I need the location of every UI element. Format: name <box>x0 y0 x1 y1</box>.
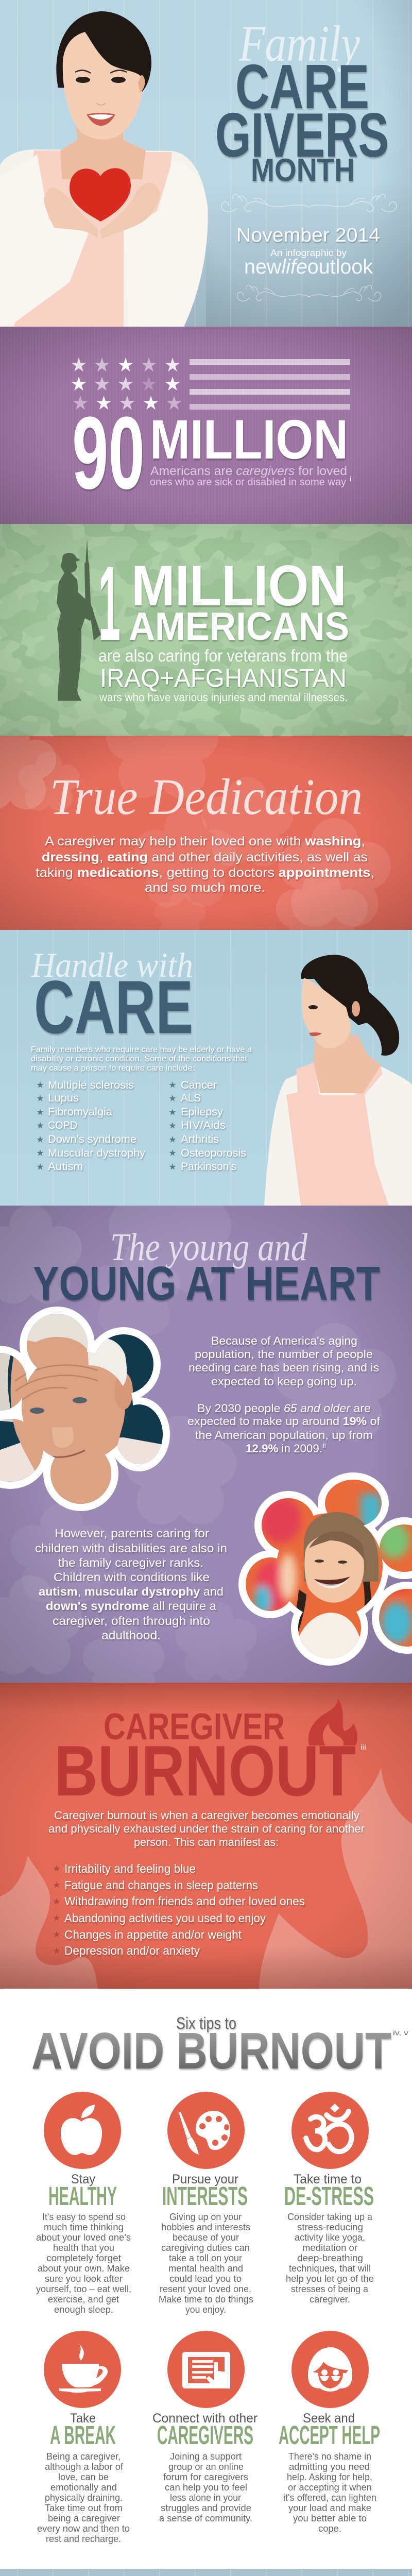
tip: take a break: love, can be <box>58 2472 109 2482</box>
ornament <box>237 285 381 301</box>
tip: seek and accept help: or accepting it when <box>288 2482 372 2493</box>
list: conditions left column: Autism <box>48 1161 83 1173</box>
ornament <box>221 194 397 212</box>
icon: flag stars <box>72 358 181 410</box>
tip: take a break <box>37 2331 130 2544</box>
statistic: 1 million americans: 1 <box>98 545 121 663</box>
tip: take a break: rest and recharge. <box>46 2534 121 2544</box>
text: burnout definition: and physically exhausted under the strain of caring for another <box>48 1822 365 1835</box>
tip: stay healthy: HEALTHY <box>48 2181 117 2211</box>
list: conditions left column: COPD <box>48 1120 77 1131</box>
tip: stay healthy <box>36 2092 131 2315</box>
tip: stay healthy: about your own. Make <box>38 2263 130 2274</box>
photo: smiling child in flower frame <box>237 1468 412 1669</box>
panel: true dedication <box>0 689 412 959</box>
text: children with disabilities: caregiver, often through into <box>53 1614 210 1628</box>
tip: take a break: A BREAK <box>50 2420 116 2450</box>
tip: stay healthy: enough sleep. <box>54 2304 113 2315</box>
icon: flag stripes <box>190 359 350 410</box>
tip: take time to de-stress: activity like yoga, <box>295 2232 365 2243</box>
list: conditions right column <box>169 1079 246 1173</box>
tip: take time to de-stress: caregiver. <box>310 2294 350 2304</box>
statistic: 90 million: 90 <box>72 396 145 511</box>
panel: 1 million americans <box>0 524 412 736</box>
text: conditions intro <box>31 1045 252 1073</box>
statistic: 1 million americans: MILLION <box>131 554 347 618</box>
tip: connect with other caregivers: struggles and provide <box>161 2503 251 2513</box>
list: conditions right column: ALS <box>181 1092 201 1104</box>
tip: take time to de-stress: stresses of being a <box>291 2284 369 2294</box>
text: conditions intro: may cause a person to require care include: <box>31 1064 195 1073</box>
text: 2030 statistic: ii <box>323 1442 326 1449</box>
tip: seek and accept help: There's no shame in <box>288 2451 371 2462</box>
tip: connect with other caregivers: can help you to feel <box>165 2482 247 2493</box>
tip: seek and accept help: cope. <box>318 2523 341 2534</box>
heading: Six tips to: Six tips to <box>176 2014 236 2032</box>
text: 2030 statistic <box>187 1402 381 1455</box>
photo: elderly man in flower frame <box>0 1303 175 1515</box>
icon: flame <box>308 1698 357 1745</box>
list: conditions right column: Arthritis <box>181 1133 219 1145</box>
text: veterans description: wars who have various injuries and mental illnesses. <box>99 691 348 704</box>
tip: stay healthy: about your loved one's <box>36 2232 131 2243</box>
panel: young and young at heart <box>0 1174 412 1701</box>
icon: tablet and hand <box>167 2331 245 2408</box>
list: burnout symptoms: Fatigue and changes in sleep patterns <box>64 1878 258 1892</box>
tip: connect with other caregivers: group or an online <box>168 2462 244 2472</box>
date and byline <box>238 228 381 274</box>
tip: take time to de-stress <box>284 2092 374 2304</box>
icon: palette and brush <box>167 2092 245 2169</box>
tip: take time to de-stress: Take time to <box>294 2172 362 2187</box>
tip: stay healthy: much time thinking <box>44 2222 124 2232</box>
list: conditions left column: Down's syndrome <box>48 1133 136 1145</box>
text: children with disabilities: autism, muscular dystrophy and <box>39 1585 224 1598</box>
tip: stay healthy: yourself, too – eat well, <box>36 2284 131 2294</box>
tip: stay healthy: exercise, and get <box>48 2294 119 2304</box>
heading: Caregiver Burnout <box>54 1706 356 1811</box>
tip: pursue your interests: Make time to do things <box>159 2294 253 2304</box>
tip: take a break: Take <box>70 2411 96 2426</box>
tip: seek and accept help: help. Asking for help, <box>287 2472 372 2482</box>
tip: take a break: Take time out from <box>45 2503 123 2513</box>
text: dedication description: A caregiver may help their loved one with washing , <box>45 834 365 849</box>
tip: stay healthy: completely forget <box>46 2253 121 2263</box>
heading: Caregiver Burnout: CAREGIVER <box>104 1706 285 1748</box>
tip: take time to de-stress: meditation or <box>302 2243 357 2253</box>
list: conditions right column: HIV/Aids <box>181 1120 226 1131</box>
tip: connect with other caregivers: less alone in your <box>170 2493 241 2503</box>
heading: The young and: The young and <box>110 1226 308 1269</box>
statistic: 1 million americans: AMERICANS <box>129 604 349 649</box>
tip: pursue your interests: caregiving duties can <box>161 2243 250 2253</box>
text: conditions intro: disability or chronic condition. Some of the conditions that <box>31 1055 248 1063</box>
text: burnout definition <box>48 1809 365 1849</box>
list: conditions left column: Lupus <box>48 1092 79 1104</box>
list: burnout symptoms: Changes in appetite and/or weight <box>64 1928 242 1941</box>
tip: seek and accept help: admitting you need <box>289 2462 370 2472</box>
tip: stay healthy: health that you <box>53 2243 114 2253</box>
photo: woman holding a red heart <box>0 11 208 327</box>
date and byline: November 2014 <box>236 225 380 246</box>
text: burnout definition: Caregiver burnout is when a caregiver becomes emotionally <box>54 1809 360 1822</box>
text: aging population: population, the number of people <box>195 1348 373 1361</box>
tip: take time to de-stress: Consider taking up a <box>287 2212 373 2222</box>
text: aging population: expected to keep going up. <box>211 1375 357 1388</box>
tip: seek and accept help: it's offered, can lighten <box>283 2493 376 2503</box>
text: aging population: Because of America's aging <box>211 1334 357 1347</box>
tip: take a break: emotionally and <box>50 2482 117 2493</box>
tip: pursue your interests: take a toll on your <box>169 2253 242 2263</box>
text: 2030 statistic: expected to make up around 19% of <box>187 1415 381 1428</box>
text: veterans description: are also caring for veterans from the <box>98 646 348 665</box>
reference marker iii: iii <box>360 1743 366 1752</box>
tip: connect with other caregivers: forum for caregivers <box>163 2472 248 2482</box>
decorative flowers <box>0 1174 396 1701</box>
tip: stay healthy: Stay <box>71 2172 95 2187</box>
list: conditions left column: Multiple sclerosis <box>48 1079 134 1091</box>
text: children with disabilities: the family caregiver ranks. <box>58 1556 203 1569</box>
tip: take time to de-stress: techniques, that will <box>289 2263 371 2274</box>
tip: seek and accept help: you better able to <box>293 2513 367 2523</box>
text: children with disabilities: However, parents caring for <box>55 1527 209 1540</box>
decorative flames <box>0 1768 412 1989</box>
list: conditions right column: Parkinson's <box>181 1161 236 1173</box>
tip: seek and accept help <box>279 2331 380 2534</box>
tip: connect with other caregivers: a sense of community. <box>159 2513 252 2523</box>
tip: pursue your interests: resent your loved one. <box>160 2284 251 2294</box>
text: veterans description <box>98 646 348 704</box>
tip: take time to de-stress: help you let go of the <box>286 2274 374 2284</box>
panel: handle with care <box>0 930 412 1206</box>
tip: take a break: every now and then to <box>37 2523 130 2534</box>
reference marker iv, v: iv, v <box>393 2029 409 2037</box>
icon: woman with glasses <box>291 2331 369 2408</box>
tip: pursue your interests: INTERESTS <box>162 2181 248 2211</box>
list: burnout symptoms: Depression and/or anxiety <box>64 1944 200 1957</box>
text: dedication description <box>36 834 374 895</box>
text: dedication description: and so much more. <box>145 880 265 895</box>
list: burnout symptoms: Irritability and feeling blue <box>64 1862 196 1875</box>
list: conditions left column <box>37 1079 146 1173</box>
statistic: 90 million: MILLION <box>150 408 348 470</box>
text: caregivers description: Americans are caregivers for loved <box>150 464 347 478</box>
text: dedication description: taking medications , getting to doctors appointments , <box>36 866 374 880</box>
text: 2030 statistic: the American population, up from <box>195 1429 373 1442</box>
list: burnout symptoms: Withdrawing from friends and other loved ones <box>64 1894 305 1908</box>
heading: True Dedication: True Dedication <box>50 768 363 825</box>
panel: footer <box>0 2569 412 2576</box>
tip: take time to de-stress: stress-reducing <box>297 2222 363 2232</box>
tip: seek and accept help: Seek and <box>303 2411 355 2426</box>
list: burnout symptoms: Abandoning activities you used to enjoy <box>64 1911 266 1925</box>
icon: apple <box>44 2092 121 2169</box>
list: burnout symptoms <box>53 1862 305 1957</box>
text: caregivers description <box>150 464 351 488</box>
date and byline: newlifeoutlook <box>244 256 373 278</box>
tip: pursue your interests: because of your <box>173 2232 239 2243</box>
icon: coffee cup <box>44 2331 121 2408</box>
list: conditions left column: Fibromyalgia <box>48 1106 112 1118</box>
panel: six tips to avoid burnout <box>0 1989 412 2569</box>
text: burnout definition: person. This can manifest as: <box>134 1836 279 1849</box>
panel: hero <box>0 0 412 327</box>
decorative flowers <box>0 689 391 959</box>
text: veterans description: IRAQ+AFGHANISTAN <box>100 664 347 692</box>
text: 2030 statistic: 12.9% in 2009. <box>246 1442 322 1455</box>
text: conditions intro: Family members who require care may be elderly or have a <box>31 1045 252 1054</box>
tip: connect with other caregivers: Connect with other <box>152 2411 258 2426</box>
text: 2030 statistic: By 2030 people 65 and older are <box>197 1402 371 1415</box>
tip: stay healthy: It's easy to spend so <box>42 2212 126 2222</box>
heading: Care Givers Month: CARE <box>235 52 369 122</box>
text: aging population <box>188 1334 379 1388</box>
tip: stay healthy: sure you look after <box>45 2274 123 2284</box>
statistic: 90 million <box>72 396 348 511</box>
tip: pursue your interests <box>159 2092 253 2315</box>
list: conditions left column: Muscular dystrophy <box>48 1147 146 1159</box>
heading: Family: Family <box>238 15 360 72</box>
panel: 90 million <box>0 327 412 524</box>
text: dedication description: dressing , eating and other daily activities, as well as <box>42 850 368 865</box>
tip: pursue your interests: Giving up on your <box>169 2212 242 2222</box>
date and byline: An infographic by <box>270 248 347 258</box>
text: children with disabilities: children with disabilities are also in <box>35 1541 227 1555</box>
text: aging population: needing care has been rising, and is <box>188 1361 379 1374</box>
list: conditions right column: Cancer <box>181 1079 217 1091</box>
tip: pursue your interests: you enjoy. <box>185 2304 226 2315</box>
photo: woman in profile <box>264 955 412 1206</box>
tip: pursue your interests: mental health and <box>168 2263 243 2274</box>
heading: Care Givers Month <box>217 64 388 183</box>
tip: connect with other caregivers <box>152 2331 258 2523</box>
text: children with disabilities <box>35 1527 227 1642</box>
heading: CARE: CARE <box>34 965 193 1049</box>
tip: connect with other caregivers: CAREGIVERS <box>157 2420 253 2450</box>
icon: om symbol <box>291 2092 369 2169</box>
text: children with disabilities: adulthood. <box>101 1629 161 1642</box>
tip: take a break: although a labor of <box>45 2462 124 2472</box>
tip: take time to de-stress: deep-breathing <box>297 2253 363 2263</box>
heading: Caregiver Burnout: BURNOUT <box>54 1731 356 1811</box>
text: caregivers description: ones who are sick or disabled in some way <box>150 477 346 488</box>
icon: soldier silhouette <box>57 539 101 701</box>
statistic: 1 million americans <box>98 545 349 663</box>
tip: pursue your interests: hobbies and interests <box>161 2222 250 2232</box>
tip: pursue your interests: could lead you to <box>169 2274 242 2284</box>
text: children with disabilities: down's syndrome all require a <box>46 1599 216 1613</box>
text: children with disabilities: Children with conditions like <box>54 1570 210 1584</box>
tip: take a break: being a caregiver <box>48 2513 120 2523</box>
list: conditions right column: Epilepsy <box>181 1106 224 1118</box>
tip: pursue your interests: Pursue your <box>172 2172 238 2187</box>
tip: take a break: Being a caregiver, <box>46 2451 121 2462</box>
panel: caregiver burnout <box>0 1683 412 1989</box>
tip: connect with other caregivers: Joining a support <box>170 2451 242 2462</box>
heading: Handle with: Handle with <box>31 945 193 985</box>
tip: seek and accept help: your load and make <box>288 2503 371 2513</box>
tip: take a break: physically draining. <box>45 2493 123 2503</box>
text: caregivers description: i <box>350 474 351 483</box>
heading: Care Givers Month: MONTH <box>251 152 355 188</box>
list: conditions right column: Osteoporosis <box>181 1147 246 1159</box>
